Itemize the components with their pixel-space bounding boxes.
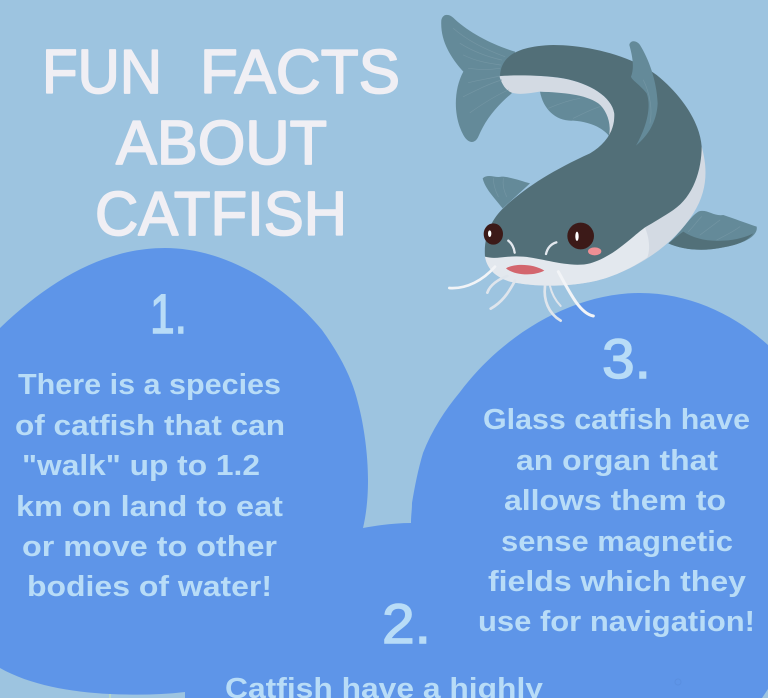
mouth: [506, 265, 544, 274]
fact 1 text: of catfish that can: [15, 410, 285, 442]
belly: [485, 147, 705, 286]
number 3: 3.: [602, 327, 651, 390]
body: [485, 45, 702, 265]
fact 1 text: There is a species: [18, 369, 281, 401]
fact 3 text: Glass catfish have: [483, 404, 750, 436]
whiskers: [449, 267, 593, 321]
fact 3 text: fields which they: [488, 566, 746, 598]
illustration: catfish: [441, 15, 757, 321]
fin rays: [453, 28, 740, 240]
left pectoral fin: [483, 176, 530, 208]
title: FUN: [42, 38, 162, 107]
title: ABOUT: [116, 109, 327, 178]
pale head underside: [485, 227, 649, 286]
nostrils: [508, 241, 556, 254]
tail fin: [441, 15, 515, 142]
right pectoral fin: [668, 211, 757, 250]
fact 2: [225, 592, 543, 698]
title: CATFISH: [95, 180, 347, 249]
back band: [499, 75, 614, 136]
blue blob panel: [0, 248, 768, 698]
fact 1 text: [15, 369, 285, 603]
small mark bottom left: [110, 694, 111, 698]
title: [42, 38, 400, 249]
small ring mark: [675, 679, 681, 685]
left eye: [484, 223, 503, 245]
cheek: [588, 247, 601, 255]
fact 1: [15, 282, 285, 603]
dorsal fin: [629, 41, 658, 146]
fact 3: [478, 327, 755, 638]
number 2: 2.: [382, 592, 431, 655]
fact 1 text: km on land to eat: [16, 491, 284, 523]
fact 3 text: [478, 404, 755, 638]
fact 3 text: an organ that: [516, 445, 719, 477]
fact 3 text: sense magnetic: [501, 526, 733, 558]
title: FACTS: [200, 38, 400, 107]
number 1: 1.: [150, 282, 187, 345]
fact 3 text: allows them to: [504, 485, 726, 517]
fact 1 text: or move to other: [22, 531, 277, 563]
fact 3 text: use for navigation!: [478, 606, 755, 638]
fact 1 text: "walk" up to 1.2: [22, 450, 260, 482]
ventral fin: [540, 92, 617, 136]
right eye: [567, 223, 594, 249]
fact 1 text: bodies of water!: [27, 571, 272, 603]
